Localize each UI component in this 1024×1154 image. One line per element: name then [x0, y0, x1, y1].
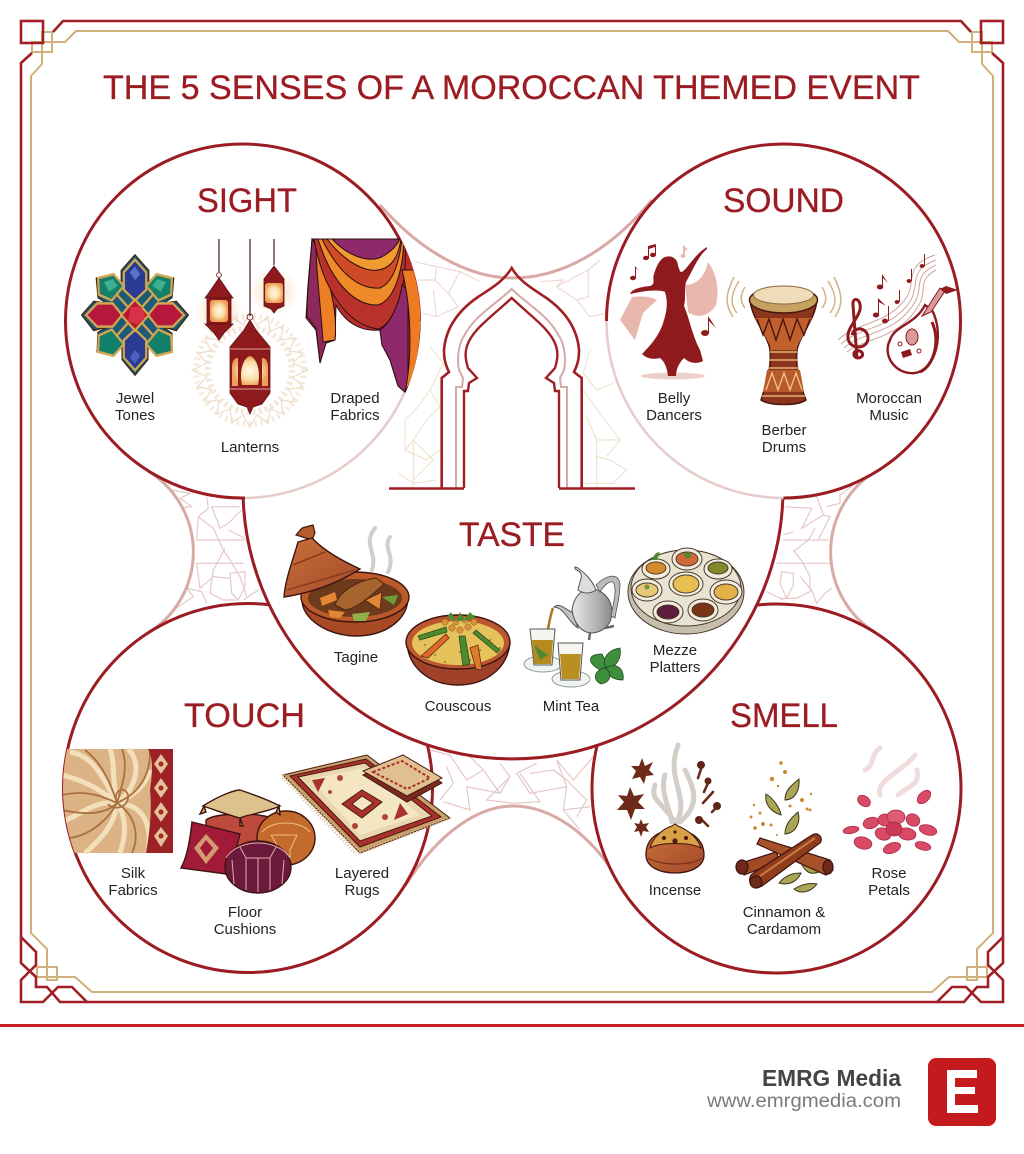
label: tagine: Tagine [334, 649, 378, 666]
label: belly dancers: Belly [658, 390, 690, 407]
icon: jewel tones [82, 255, 188, 375]
icon: rose petals [843, 748, 938, 856]
label: mint tea: Mint Tea [543, 698, 600, 715]
brand name: EMRG Media [762, 1065, 901, 1091]
label: silk fabrics: Silk [121, 865, 145, 882]
label: cinnamon and cardamom: Cinnamon & [743, 904, 825, 921]
icon: berber drum [727, 277, 841, 404]
icon: mint tea [524, 567, 623, 687]
label: draped fabrics: Fabrics [330, 407, 380, 424]
lattice pattern: around arch [398, 260, 627, 487]
icon: lanterns [192, 239, 308, 427]
label: jewel tones: Tones [115, 407, 155, 424]
panel: smell [592, 604, 961, 973]
label: incense: Incense [649, 882, 701, 899]
icon: couscous [406, 612, 510, 685]
panel: sound [606, 144, 960, 498]
icon: moroccan music [838, 254, 958, 373]
lattice pattern: bottom gap [430, 750, 593, 830]
label: floor cushions: Floor [228, 904, 262, 921]
label: layered rugs: Layered [335, 865, 389, 882]
label: moroccan music: Moroccan [856, 390, 922, 407]
footer rule [0, 1024, 1024, 1027]
lattice pattern: right gap [767, 485, 853, 603]
icon: belly dancer [620, 244, 718, 380]
label: berber drums: Drums [762, 439, 806, 456]
heading: sound: SOUND [723, 182, 844, 220]
icon: E logo [928, 1058, 996, 1126]
icon: silk fabric [60, 749, 173, 853]
label: moroccan music: Music [869, 407, 909, 424]
title: THE 5 SENSES OF A MOROCCAN THEMED EVENT [103, 69, 920, 107]
heading: sight: SIGHT [197, 182, 297, 220]
label: rose petals: Rose [871, 865, 907, 882]
icon: cinnamon and cardamom [736, 761, 833, 892]
heading: taste: TASTE [459, 516, 565, 554]
icon: mezze platter [628, 548, 744, 634]
label: berber drums: Berber [761, 422, 807, 439]
label: draped fabrics: Draped [330, 390, 380, 407]
heading: smell: SMELL [730, 697, 838, 735]
icon: tagine [284, 525, 409, 636]
label: belly dancers: Dancers [646, 407, 702, 424]
connecting arcs between circles [148, 200, 876, 886]
icon: incense [617, 745, 721, 873]
label: lanterns: Lanterns [221, 439, 279, 456]
panel: taste [243, 489, 783, 759]
footer: brand [706, 1058, 996, 1126]
panel: touch [60, 604, 450, 972]
label: silk fabrics: Fabrics [108, 882, 158, 899]
label: cinnamon and cardamom: Cardamom [747, 921, 821, 938]
icon: floor cushions [181, 790, 315, 893]
icon: layered rugs [283, 755, 450, 854]
label: jewel tones: Jewel [116, 390, 154, 407]
label: layered rugs: Rugs [344, 882, 380, 899]
label: mezze platters: Mezze [653, 642, 697, 659]
arch: keyhole gate [389, 268, 635, 488]
label: couscous: Couscous [425, 698, 491, 715]
label: floor cushions: Cushions [214, 921, 276, 938]
lattice pattern: left gap [172, 490, 258, 610]
label: mezze platters: Platters [650, 659, 700, 676]
icon: draped fabrics [306, 239, 422, 392]
panel: sight [65, 144, 422, 498]
brand url: www.emrgmedia.com [706, 1091, 901, 1112]
heading: touch: TOUCH [184, 697, 305, 735]
label: rose petals: Petals [868, 882, 910, 899]
